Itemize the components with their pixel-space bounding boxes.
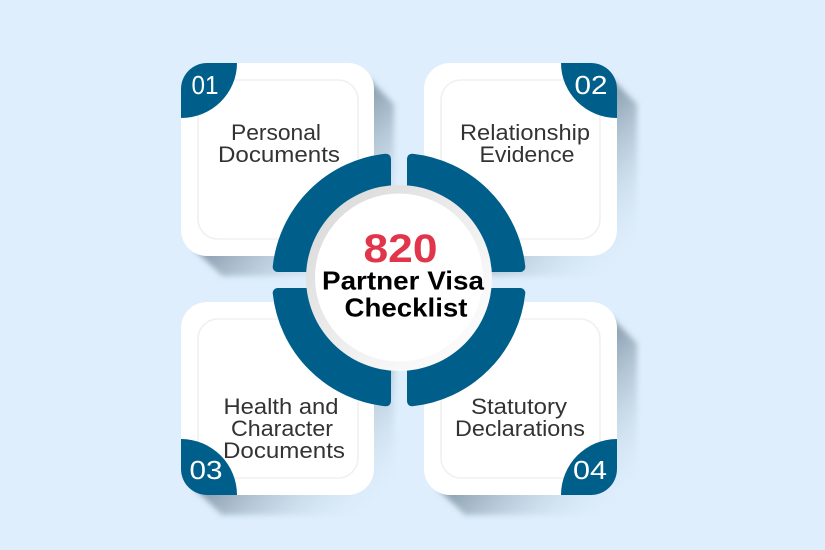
text: statutory declarations: Statutory [471, 394, 567, 419]
heading: 820 partner visa checklist: Partner Visa [322, 266, 485, 296]
chart: central ring segments [278, 159, 520, 401]
text: relationship evidence: Evidence [480, 142, 574, 167]
text: statutory declarations [455, 394, 585, 441]
text: health and character documents: Health and [224, 394, 338, 419]
icon: number badge 01 [181, 63, 237, 118]
icon: number badge 03: 03 [190, 455, 222, 485]
text: personal documents [218, 120, 340, 167]
icon: number badge 04: 04 [573, 455, 607, 485]
text: health and character documents: Character [231, 416, 333, 441]
text: health and character documents [223, 394, 345, 463]
heading: 820 partner visa checklist [322, 227, 485, 322]
text: relationship evidence [460, 120, 590, 167]
icon: number badge 04 [561, 439, 617, 495]
text: health and character documents: Documents [223, 438, 345, 463]
text: relationship evidence: Relationship [460, 120, 590, 145]
icon: number badge 02: 02 [574, 70, 608, 100]
heading: 820 partner visa checklist: 820 [364, 227, 438, 271]
icon: number badge 01: 01 [192, 70, 218, 100]
centre disc with grey rim [306, 185, 492, 371]
icon: number badge 03 [181, 439, 237, 495]
icon: number badge 02 [561, 63, 617, 118]
text: personal documents: Personal [231, 120, 321, 145]
heading: 820 partner visa checklist: Checklist [344, 292, 468, 322]
panel: card 3 health and character documents [181, 302, 394, 515]
panel: card 4 statutory declarations [424, 302, 637, 515]
panel: card 1 personal documents [181, 63, 394, 276]
panel: card 2 relationship evidence [424, 63, 637, 276]
text: statutory declarations: Declarations [455, 416, 585, 441]
text: personal documents: Documents [218, 142, 340, 167]
